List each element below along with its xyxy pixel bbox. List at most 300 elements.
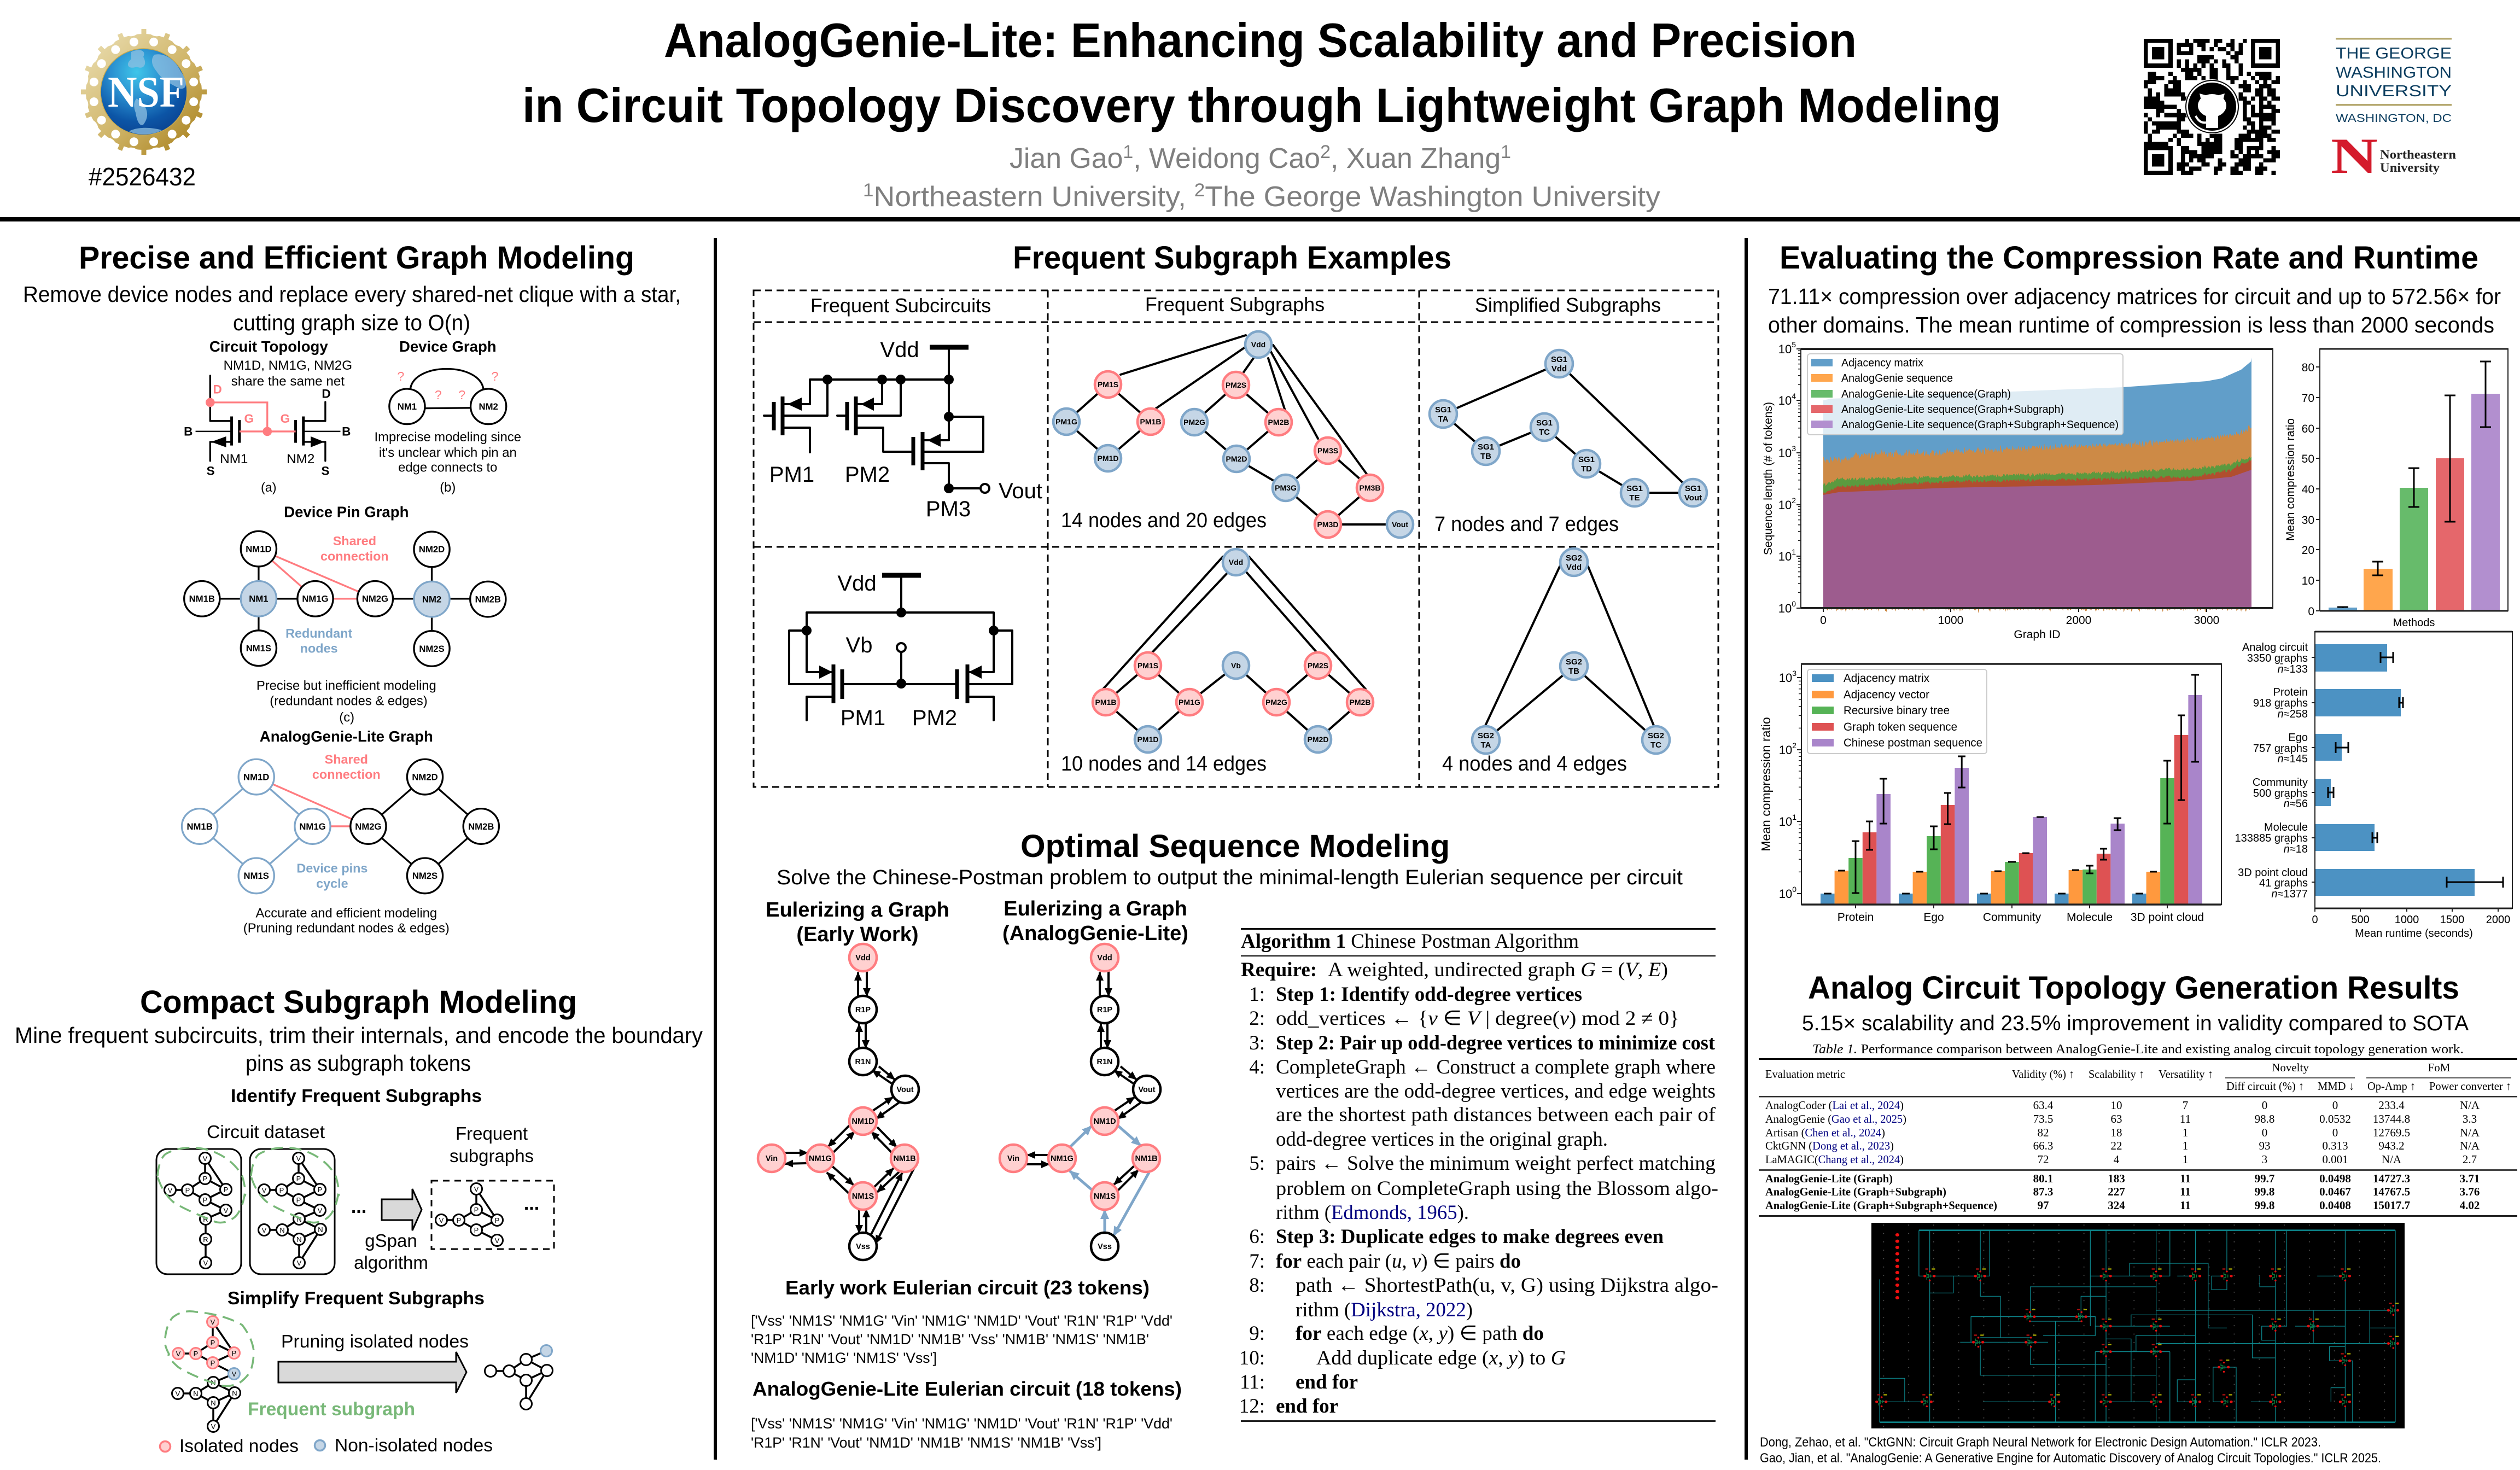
graph: 7 nodes and 7 edges: TC	[1539, 428, 1550, 437]
diagram: circuit dataset: P	[203, 1196, 207, 1204]
chart: sequence length by graph ID: 10	[1778, 446, 1792, 460]
diagram: circuit topology	[184, 338, 352, 494]
chart: mean compression ratio by method: 0	[2308, 605, 2314, 618]
graph: 10 nodes and 14 edges: Vb	[1231, 661, 1241, 670]
algorithm box: Algorithm 1 Chinese Postman Algorithm	[1241, 930, 1579, 953]
table: performance comparison: 14727.3	[2373, 1172, 2410, 1185]
diagram: circuit dataset: P	[296, 1196, 301, 1204]
text: early work sequence: 'R1P' 'R1N' 'Vout' 'NM1D' 'NM1B' 'Vss' 'NM1B' 'NM1S' 'NM1B'	[751, 1331, 1149, 1348]
legend: Recursive binary tree	[1844, 704, 1950, 717]
legend: AnalogGenie-Lite sequence(Graph+Subgraph+Sequence)	[1841, 419, 2119, 431]
circuit: two transistors: PM1	[841, 706, 885, 730]
chart: mean runtime by dataset: 2000	[2486, 914, 2510, 926]
algorithm box: A weighted, undirected graph G = (V, E)	[1328, 959, 1668, 981]
references: Gao, Jian, et al. "AnalogGenie: A Generative Engine for Automatic Discovery of Analog Circuit Topologies." ICLR 2025.	[1760, 1451, 2381, 1466]
diagram: frequent subgraphs: P	[495, 1216, 499, 1224]
heading: Compact Subgraph Modeling	[140, 984, 577, 1020]
diagram: device graph: Device Graph	[399, 338, 497, 355]
table: performance comparison: MMD ↓	[2318, 1080, 2354, 1093]
heading: Analog Circuit Topology Generation Results	[1808, 970, 2459, 1006]
diagram: device pin graph	[184, 504, 506, 725]
graph: early work eulerization: (Early Work)	[796, 923, 919, 946]
diagram: circuit topology: S	[207, 464, 215, 477]
graph: 14 nodes and 20 edges: PM1B	[1140, 417, 1161, 426]
graph: 4 nodes and 4 edges: SG2	[1648, 731, 1664, 740]
algorithm box: 10:	[1239, 1347, 1265, 1369]
graph: 7 nodes and 7 edges	[1430, 350, 1707, 536]
table: performance comparison: 324	[2108, 1199, 2125, 1212]
diagram: device pin graph: NM1	[249, 594, 269, 604]
legend	[1807, 669, 1987, 754]
graph: 4 nodes and 4 edges: Vdd	[1566, 563, 1582, 572]
chart: sequence length by graph ID: 0	[1792, 599, 1796, 608]
graph: 10 nodes and 14 edges: 10 nodes and 14 edges	[1061, 752, 1267, 775]
graph: 14 nodes and 20 edges: PM1D	[1098, 454, 1118, 463]
chart: mean runtime by dataset: 1000	[2395, 914, 2419, 926]
algorithm box: vertices are the odd-degree vertices, and edge weights	[1276, 1080, 1716, 1102]
table: performance comparison: 3.3	[2463, 1112, 2477, 1125]
table: performance comparison: N/A	[2460, 1126, 2480, 1139]
heading: Optimal Sequence Modeling	[1020, 829, 1450, 864]
graph: AnalogGenie-Lite eulerization: NM1G	[1051, 1154, 1074, 1163]
algorithm box: path ← ShortestPath(u, v, G) using Dijkstra algo-	[1296, 1274, 1718, 1297]
graph: AnalogGenie-Lite eulerization: (AnalogGenie-Lite)	[1002, 922, 1188, 945]
chart: mean compression ratio by method	[2284, 349, 2508, 629]
graph: 10 nodes and 14 edges: PM1B	[1095, 698, 1116, 707]
circuit: three transistors: Vout	[999, 479, 1042, 503]
graph: 14 nodes and 20 edges: PM2S	[1226, 381, 1246, 389]
sub-heading: simplify: Simplify Frequent Subgraphs	[228, 1288, 485, 1308]
authors and affiliations: 1	[1123, 142, 1133, 162]
diagram: circuit dataset: P	[318, 1186, 322, 1194]
chart: mean runtime by dataset: 41 graphs	[2259, 877, 2308, 889]
chart: mean compression ratio by dataset: 0	[1792, 885, 1796, 894]
diagram: device pin graph: Device Pin Graph	[284, 504, 409, 521]
chart: sequence length by graph ID: 1000	[1938, 614, 1963, 627]
diagram: device pin graph: Precise but inefficient modeling	[256, 679, 436, 693]
graph: 4 nodes and 4 edges: TB	[1568, 667, 1579, 676]
panel: Precise and Efficient Graph Modeling	[23, 240, 681, 936]
table: performance comparison: 183	[2108, 1172, 2125, 1185]
graph: early work eulerization: Vss	[856, 1242, 870, 1251]
graph: AnalogGenie-Lite eulerization: Vin	[1007, 1154, 1019, 1163]
panel: Evaluating the Compression Rate and Runtime	[1759, 240, 2512, 940]
chart: mean runtime by dataset: Analog circuit	[2242, 641, 2308, 654]
chart: mean compression ratio by method: 80	[2302, 361, 2314, 374]
chart: mean runtime by dataset: Ego	[2288, 732, 2308, 744]
diagram: device pin graph: Redundant	[285, 626, 352, 640]
graph: early work eulerization: Vdd	[855, 954, 871, 962]
table: performance comparison: 15017.7	[2373, 1199, 2410, 1212]
diagram: isolated node subgraph: V	[211, 1422, 216, 1431]
chart: mean runtime by dataset: 3350 graphs	[2247, 652, 2308, 664]
chart: mean compression ratio by dataset: Molecule	[2067, 911, 2113, 924]
table: performance comparison: 0	[2262, 1126, 2267, 1139]
logo: George Washington University: THE GEORGE	[2336, 45, 2452, 62]
table: performance comparison: 82	[2038, 1126, 2049, 1139]
graph: 10 nodes and 14 edges: PM2S	[1308, 661, 1328, 670]
circuit: three transistors	[764, 338, 1042, 521]
references: Dong, Zehao, et al. "CktGNN: Circuit Graph Neural Network for Electronic Design Automation." ICLR 2023.	[1760, 1435, 2321, 1450]
legend: Adjacency matrix	[1844, 672, 1929, 685]
chart: mean runtime by dataset: n̄≈258	[2278, 708, 2308, 720]
table headers	[810, 293, 1661, 317]
chart: mean compression ratio by dataset	[1759, 664, 2221, 924]
table: performance comparison: AnalogGenie-Lite (Graph)	[1765, 1172, 1893, 1185]
table: performance comparison: Versatility ↑	[2159, 1068, 2213, 1081]
diagram: AnalogGenie-Lite graph: cycle	[316, 877, 348, 891]
legend: Adjacency matrix	[1841, 357, 1923, 369]
diagram: circuit dataset: V	[168, 1186, 173, 1194]
chart: sequence length by graph ID: 10	[1778, 550, 1792, 563]
chart: sequence length by graph ID: 10	[1778, 602, 1792, 615]
chart: mean runtime by dataset: Mean runtime (seconds)	[2355, 928, 2473, 940]
legend: Adjacency vector	[1844, 689, 1929, 701]
chart: mean runtime by dataset	[2235, 632, 2512, 940]
graph: AnalogGenie-Lite eulerization: Vout	[1138, 1086, 1156, 1094]
chart: mean compression ratio by dataset: Ego	[1923, 911, 1944, 924]
algorithm box: rithm (Edmonds, 1965).	[1276, 1201, 1469, 1224]
graph: early work eulerization: NM1B	[893, 1154, 916, 1163]
diagram: frequent subgraphs: V	[439, 1216, 444, 1224]
chart: mean runtime by dataset: 0	[2312, 914, 2318, 926]
table: performance comparison: AnalogGenie (Gao et al., 2025)	[1765, 1112, 1906, 1125]
graph: AnalogGenie-Lite eulerization: Eulerizing a Graph	[1004, 897, 1187, 920]
graph: 7 nodes and 7 edges: Vout	[1684, 493, 1702, 503]
diagram: simplified graph	[485, 1345, 552, 1410]
chart: sequence length by graph ID	[1762, 340, 2273, 641]
references	[1760, 1435, 2381, 1466]
chart: sequence length by graph ID: 10	[1778, 394, 1792, 407]
panel: Optimal Sequence Modeling	[751, 829, 1718, 1451]
algorithm box: pairs ← Solve the minimum weight perfect matching	[1276, 1152, 1716, 1175]
algorithm box: for each edge (x, y) ∈ path do	[1296, 1322, 1544, 1345]
table: performance comparison: 943.2	[2378, 1139, 2405, 1152]
table: performance comparison: 0.0467	[2319, 1185, 2351, 1198]
diagram: circuit dataset: P	[185, 1186, 190, 1194]
arrow: pruning isolated nodes: Pruning isolated nodes	[281, 1331, 469, 1351]
diagram: circuit topology: NM2	[287, 452, 314, 466]
table: performance comparison: 1	[2183, 1153, 2188, 1166]
arrow: gSpan: algorithm	[354, 1252, 428, 1273]
chart: mean compression ratio by method: 30	[2302, 514, 2314, 527]
graph: 7 nodes and 7 edges: SG1	[1578, 455, 1595, 464]
arrow: gSpan: gSpan	[365, 1230, 417, 1251]
description	[1768, 284, 2501, 337]
diagram: circuit topology: G	[281, 412, 290, 425]
authors and affiliations: , Weidong Cao	[1133, 143, 1320, 174]
chart: mean compression ratio by dataset: Community	[1983, 911, 2041, 924]
description: other domains. The mean runtime of compression is less than 2000 seconds	[1768, 312, 2494, 337]
table: performance comparison: AnalogCoder (Lai et al., 2024)	[1765, 1099, 1904, 1112]
table headers: Simplified Subgraphs	[1475, 294, 1661, 316]
algorithm box: 11:	[1240, 1371, 1265, 1393]
diagram: device graph: Imprecise modeling since	[375, 430, 521, 445]
diagram: device pin graph: NM2B	[475, 594, 501, 604]
diagram: AnalogGenie-Lite graph: Accurate and efficient modeling	[256, 907, 437, 921]
description	[15, 1023, 703, 1076]
table: performance comparison: 0.0532	[2319, 1112, 2351, 1125]
diagram: device pin graph: NM2S	[419, 644, 445, 654]
diagram: circuit dataset: P	[203, 1175, 207, 1183]
graph: AnalogGenie-Lite eulerization: NM1D	[1093, 1117, 1116, 1126]
authors and affiliations: 2	[1320, 142, 1331, 162]
diagram: circuit dataset: V	[224, 1206, 229, 1215]
graph: early work eulerization: R1N	[855, 1058, 871, 1066]
diagram: circuit dataset: N	[318, 1226, 323, 1234]
table grid	[754, 290, 1718, 787]
table: performance comparison: 72	[2038, 1153, 2049, 1166]
graph: 14 nodes and 20 edges: PM1S	[1098, 380, 1118, 389]
chart: mean compression ratio by method: Mean compression ratio	[2284, 418, 2297, 541]
diagram: device pin graph: NM1G	[302, 594, 329, 604]
algorithm box: odd_vertices ← { v ∈ V | degree(v) mod 2 ≠ 0}	[1276, 1007, 1679, 1030]
diagram: circuit dataset: N	[296, 1215, 302, 1223]
description: Remove device nodes and replace every shared-net clique with a star,	[23, 282, 681, 307]
table: performance comparison: Evaluation metric	[1765, 1068, 1845, 1081]
table: performance comparison: 11	[2180, 1185, 2191, 1198]
algorithm box: 8:	[1249, 1274, 1265, 1297]
diagram: circuit dataset: P	[296, 1175, 301, 1183]
circuit: two transistors	[789, 571, 1012, 730]
diagram: circuit topology: B	[184, 424, 192, 438]
legend	[1807, 354, 2123, 435]
algorithm box: odd-degree vertices in the original graph.	[1276, 1128, 1608, 1151]
diagram: AnalogGenie-Lite graph: NM1G	[299, 821, 326, 832]
graph: 10 nodes and 14 edges: PM2G	[1265, 698, 1287, 707]
diagram: AnalogGenie-Lite graph: Device pins	[296, 861, 368, 876]
award number: #2526432	[89, 162, 196, 191]
legend: AnalogGenie-Lite sequence(Graph)	[1841, 388, 2011, 400]
chart: sequence length by graph ID: Graph ID	[2014, 628, 2061, 641]
legend: node types: Isolated nodes	[179, 1436, 299, 1456]
graph: 7 nodes and 7 edges: TE	[1629, 493, 1640, 503]
table: performance comparison: 4	[2114, 1153, 2120, 1166]
table: performance comparison: AnalogGenie-Lite (Graph+Subgraph+Sequence)	[1765, 1199, 1997, 1212]
table: performance comparison: 97	[2038, 1199, 2049, 1212]
graph: 4 nodes and 4 edges: TA	[1481, 740, 1491, 750]
table: performance comparison: 99.8	[2255, 1185, 2274, 1198]
diagram: AnalogGenie-Lite graph: connection	[312, 767, 381, 781]
graph: 14 nodes and 20 edges: PM2D	[1226, 454, 1247, 463]
graph: 4 nodes and 4 edges: SG2	[1478, 731, 1494, 740]
diagram: AnalogGenie-Lite graph: NM1D	[243, 772, 269, 782]
graph: 7 nodes and 7 edges: TA	[1438, 415, 1449, 424]
diagram: circuit dataset: V	[296, 1154, 301, 1163]
diagram: device graph	[375, 338, 521, 495]
diagram: circuit dataset: P	[224, 1186, 228, 1194]
algorithm box: Step 3: Duplicate edges to make degrees even	[1276, 1226, 1664, 1248]
diagram: circuit topology: NM1D, NM1G, NM2G	[224, 358, 352, 373]
legend: AnalogGenie sequence	[1841, 372, 1953, 384]
table: performance comparison: Novelty	[2272, 1061, 2309, 1074]
algorithm box: Add duplicate edge (x, y) to G	[1316, 1347, 1566, 1369]
graph: 10 nodes and 14 edges: Vdd	[1229, 558, 1243, 567]
chart: mean compression ratio by dataset: 2	[1792, 741, 1796, 750]
table: performance comparison: 0	[2262, 1099, 2267, 1112]
graph: AnalogGenie-Lite eulerization: R1P	[1097, 1006, 1112, 1014]
heading: Frequent Subgraph Examples	[1013, 240, 1451, 276]
logo: George Washington University: WASHINGTON, DC	[2336, 112, 2452, 125]
table: performance comparison: 11	[2180, 1172, 2191, 1185]
diagram: isolated node subgraph	[165, 1311, 254, 1432]
authors and affiliations: The George Washington University	[1205, 181, 1660, 213]
legend: Chinese postman sequence	[1844, 737, 1982, 749]
diagram: device graph: ?	[397, 369, 404, 383]
chart: sequence length by graph ID: 2	[1792, 496, 1796, 505]
sub-heading: identify: Identify Frequent Subgraphs	[231, 1086, 482, 1106]
graph: 7 nodes and 7 edges: TB	[1480, 452, 1491, 461]
graph: 14 nodes and 20 edges: PM3G	[1275, 483, 1297, 492]
graph: AnalogGenie-Lite eulerization: NM1S	[1094, 1192, 1116, 1201]
table: performance comparison: 99.8	[2255, 1199, 2274, 1212]
table: performance comparison: 99.7	[2255, 1172, 2274, 1185]
text: early work sequence: Early work Eulerian circuit (23 tokens)	[785, 1276, 1150, 1299]
diagram: isolated node subgraph: P	[211, 1339, 215, 1347]
diagram: device graph: edge connects to	[398, 461, 497, 475]
table: performance comparison: 13744.8	[2373, 1112, 2410, 1125]
algorithm box: are the shortest path distances between each pair of	[1276, 1104, 1716, 1126]
table: performance comparison: 7	[2183, 1099, 2188, 1112]
algorithm box: Step 2: Pair up odd-degree vertices to minimize cost	[1276, 1032, 1716, 1054]
text: AnalogGenie-Lite sequence: 'R1P' 'R1N' 'Vout' 'NM1D' 'NM1B' 'NM1S' 'NM1B' 'Vss']	[751, 1434, 1101, 1451]
chart: mean compression ratio by method: 10	[2302, 575, 2314, 587]
algorithm box: 2:	[1249, 1007, 1265, 1030]
chart: mean runtime by dataset: Protein	[2273, 686, 2308, 698]
chart: sequence length by graph ID: Sequence length (# of tokens)	[1762, 402, 1775, 555]
graph: AnalogGenie-Lite eulerization: R1N	[1096, 1058, 1113, 1066]
table: performance comparison: CktGNN (Dong et al., 2023)	[1765, 1139, 1894, 1152]
diagram: circuit topology: Circuit Topology	[209, 338, 328, 355]
algorithm box: 5:	[1249, 1152, 1265, 1175]
graph: 7 nodes and 7 edges: SG1	[1551, 355, 1567, 364]
table: performance comparison: 4.02	[2460, 1199, 2480, 1212]
diagram: AnalogGenie-Lite graph: NM2B	[468, 821, 494, 832]
diagram: frequent subgraphs: Frequent	[456, 1123, 528, 1144]
graph: AnalogGenie-Lite eulerization: Vdd	[1097, 954, 1112, 962]
chart: mean runtime by dataset: 918 graphs	[2253, 697, 2308, 709]
graph: 14 nodes and 20 edges: 14 nodes and 20 edges	[1061, 509, 1267, 532]
graph: 10 nodes and 14 edges: PM2D	[1308, 735, 1328, 744]
diagram: circuit dataset	[156, 1122, 339, 1274]
diagram: frequent subgraphs: V	[474, 1185, 479, 1193]
chart: sequence length by graph ID: 0	[1820, 614, 1827, 627]
panel: Analog Circuit Topology Generation Results	[1759, 970, 2517, 1466]
circuit: three transistors: PM1	[769, 463, 814, 487]
table: performance comparison: Artisan (Chen et al., 2024)	[1765, 1126, 1885, 1139]
diagram: isolated node subgraph: N	[211, 1379, 216, 1387]
graph: 14 nodes and 20 edges: PM3S	[1317, 446, 1338, 455]
table: performance comparison: Scalability ↑	[2089, 1068, 2144, 1081]
logo: NSF: NSF	[108, 68, 184, 116]
diagram: circuit dataset: V	[262, 1226, 267, 1234]
diagram: frequent subgraphs	[431, 1123, 554, 1249]
chart: mean runtime by dataset: n̄≈145	[2278, 752, 2308, 765]
table headers: Frequent Subgraphs	[1145, 293, 1325, 316]
description: 71.11× compression over adjacency matrices for circuit and up to 572.56× for	[1768, 284, 2501, 309]
graph: early work eulerization: Vout	[896, 1086, 914, 1094]
graph: early work eulerization: NM1G	[809, 1154, 832, 1163]
label: frequent subgraph: Frequent subgraph	[248, 1399, 415, 1420]
diagram: device pin graph: NM2	[422, 594, 441, 604]
diagram: frequent subgraphs: P	[457, 1216, 461, 1224]
authors and affiliations: 2	[1194, 180, 1205, 201]
algorithm box: problem on CompleteGraph using the Blossom algo-	[1276, 1177, 1718, 1200]
table: performance comparison: 0.001	[2322, 1153, 2348, 1166]
graph: 4 nodes and 4 edges: SG2	[1566, 553, 1582, 563]
diagram: AnalogGenie-Lite graph: NM2G	[355, 821, 382, 832]
diagram: circuit dataset: V	[203, 1259, 208, 1267]
table: performance comparison: 12769.5	[2373, 1126, 2410, 1139]
graph: 7 nodes and 7 edges: TD	[1581, 464, 1592, 474]
graph: early work eulerization: NM1D	[851, 1117, 874, 1126]
logo: George Washington University: UNIVERSITY	[2336, 83, 2452, 100]
diagram: device pin graph: nodes	[300, 641, 338, 655]
diagram: circuit topology: (a)	[261, 480, 277, 494]
diagram: AnalogGenie-Lite graph: (Pruning redundant nodes & edges)	[243, 921, 450, 936]
image: circuit layout schematic	[1871, 1223, 2405, 1428]
chart: sequence length by graph ID: 3	[1792, 444, 1796, 453]
diagram: circuit dataset: V	[203, 1154, 208, 1163]
QR code	[2144, 39, 2280, 175]
text: early work sequence: ['Vss' 'NM1S' 'NM1G' 'Vin' 'NM1G' 'NM1D' 'Vout' 'R1N' 'R1P' 'Vdd'	[751, 1312, 1172, 1329]
chart: mean runtime by dataset: 3D point cloud	[2238, 867, 2308, 879]
diagram: frequent subgraphs: subgraphs	[450, 1146, 534, 1166]
logo: NSF	[68, 16, 219, 167]
graph: AnalogGenie-Lite eulerization: Vss	[1098, 1242, 1112, 1251]
description: pins as subgraph tokens	[246, 1051, 471, 1076]
diagram: device graph: ?	[435, 388, 442, 402]
diagram: frequent subgraphs: P	[474, 1226, 479, 1234]
panel: Compact Subgraph Modeling	[15, 984, 703, 1456]
chart: mean compression ratio by dataset: 10	[1779, 671, 1792, 685]
table: performance comparison: 22	[2111, 1139, 2122, 1152]
logo: George Washington University	[2336, 38, 2452, 125]
chart: mean compression ratio by dataset: 10	[1779, 887, 1792, 901]
graph: 14 nodes and 20 edges: PM3D	[1317, 520, 1338, 529]
logo: George Washington University: WASHINGTON	[2336, 64, 2452, 81]
table headers: Frequent Subcircuits	[810, 294, 991, 317]
diagram: isolated node subgraph: V	[211, 1318, 215, 1326]
algorithm box: Step 1: Identify odd-degree vertices	[1276, 983, 1582, 1006]
diagram: circuit dataset: R	[203, 1215, 208, 1223]
diagram: isolated node subgraph: V	[232, 1370, 237, 1378]
diagram: frequent subgraphs: ...	[524, 1193, 539, 1214]
chart: mean runtime by dataset: 757 graphs	[2253, 743, 2308, 755]
table: performance comparison: 18	[2111, 1126, 2122, 1139]
chart: mean runtime by dataset: Community	[2253, 777, 2308, 789]
diagram: AnalogGenie-Lite graph: NM1S	[244, 871, 269, 881]
logo: Northeastern University	[2331, 128, 2456, 184]
diagram: AnalogGenie-Lite graph: NM1B	[186, 821, 213, 832]
logo: Northeastern University: Northeastern	[2380, 148, 2456, 161]
legend: AnalogGenie-Lite sequence(Graph+Subgraph)	[1841, 404, 2064, 416]
table: performance comparison: 233.4	[2378, 1099, 2405, 1112]
table: performance comparison: Op-Amp ↑	[2367, 1080, 2416, 1093]
algorithm box: for each pair (u, v) ∈ pairs do	[1276, 1250, 1521, 1273]
algorithm box: end for	[1276, 1395, 1338, 1418]
table: performance comparison: 11	[2180, 1112, 2191, 1125]
text: early work sequence: 'NM1D' 'NM1G' 'NM1S' 'Vss']	[751, 1350, 937, 1366]
diagram: device pin graph: NM1B	[189, 594, 215, 604]
chart: mean compression ratio by method: 70	[2302, 392, 2314, 405]
diagram: circuit dataset: Circuit dataset	[207, 1122, 325, 1142]
diagram: frequent subgraphs: P	[474, 1206, 479, 1214]
text: AnalogGenie-Lite sequence: ['Vss' 'NM1S' 'NM1G' 'Vin' 'NM1G' 'NM1D' 'Vout' 'R1N' 'R1P' 'Vdd'	[751, 1415, 1172, 1432]
diagram: isolated node subgraph: P	[211, 1359, 215, 1367]
authors and affiliations	[863, 142, 1660, 213]
table: performance comparison: LaMAGIC(Chang et al., 2024)	[1765, 1153, 1904, 1166]
